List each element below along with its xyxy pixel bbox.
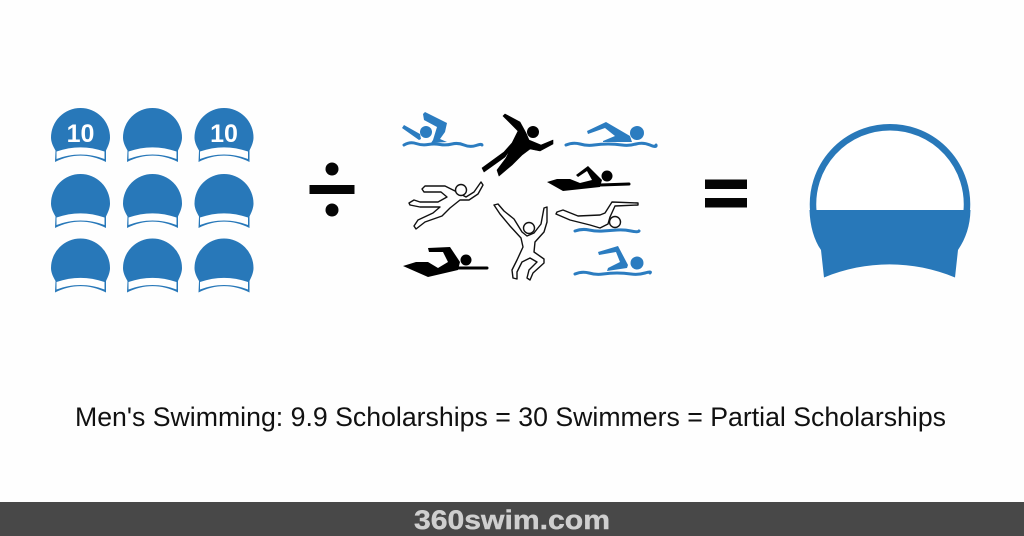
icon: white outlined swimmer left bbox=[409, 182, 483, 229]
cap with number 10, top right bbox=[194, 108, 254, 162]
footer brand text: 360swim.com bbox=[414, 505, 610, 535]
panel: group of swimmers bbox=[402, 112, 656, 280]
icon: partial scholarship cap half filled bbox=[810, 127, 970, 278]
caption: Men's Swimming: 9.9 Scholarships = 30 Swimmers = Partial Scholarships bbox=[75, 402, 946, 432]
icon: blue swimmer top left bbox=[402, 112, 482, 146]
icon: equals sign bbox=[705, 180, 747, 208]
cap, middle left bbox=[51, 174, 110, 228]
cap, bottom middle bbox=[123, 238, 182, 292]
cap with number 10, top left: 10 bbox=[67, 120, 94, 148]
cap, middle right bbox=[194, 174, 254, 228]
cap, centre bbox=[123, 174, 182, 228]
icon: white outlined swimmer right bbox=[556, 202, 639, 232]
icon: black swimmer middle bbox=[547, 166, 629, 191]
icon: blue swimmer top right bbox=[566, 122, 656, 146]
icon: white outlined figure centre bbox=[494, 204, 547, 280]
cap with number 10, top left bbox=[51, 108, 110, 162]
panel: grid of nine scholarship caps bbox=[51, 108, 254, 292]
cap, top middle bbox=[123, 108, 182, 162]
cap, bottom left bbox=[51, 238, 110, 292]
icon: division sign bbox=[310, 162, 354, 216]
footer bar bbox=[0, 502, 1024, 536]
icon: blue swimmer bottom right bbox=[575, 246, 650, 274]
icon: black swimmer bottom left bbox=[403, 247, 487, 277]
icon: black diver bbox=[482, 114, 553, 176]
cap with number 10, top right: 10 bbox=[210, 120, 238, 148]
cap, bottom right bbox=[194, 238, 254, 292]
